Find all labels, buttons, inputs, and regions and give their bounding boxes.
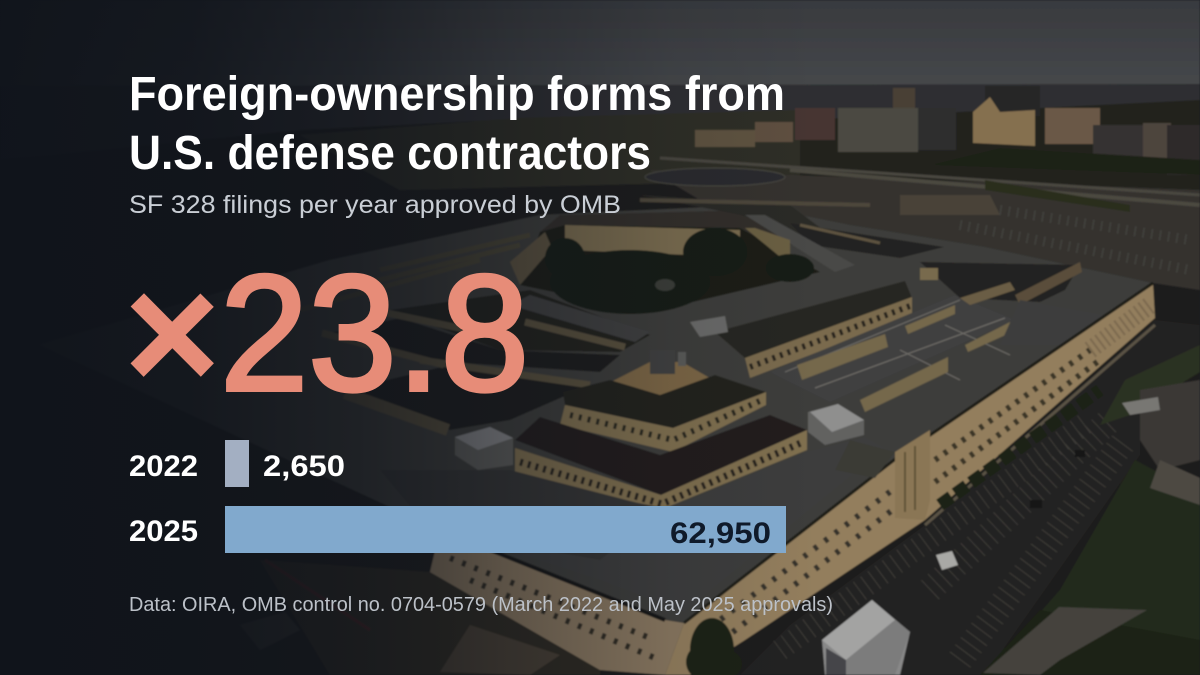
row: 2025 [129, 506, 786, 553]
title [129, 68, 785, 180]
title: Foreign-ownership forms from [129, 68, 785, 121]
far right wedge roofs [920, 262, 1120, 345]
row: 2022: 2022 [129, 450, 198, 483]
central tower block [605, 350, 722, 397]
lawn and grounds on the right [980, 345, 1200, 675]
right wedge light roof with white lines [770, 295, 1015, 412]
right wedge dark roof strip [690, 281, 912, 378]
big multiplier: 23.8 [220, 241, 529, 425]
roads and parking lots behind the building [645, 158, 1200, 290]
skyline buildings [695, 86, 1200, 175]
source note: Data: OIRA, OMB control no. 0704-0579 (March 2022 and May 2025 approvals) [129, 594, 833, 616]
rear wedge of the building [540, 195, 944, 272]
big multiplier: × [124, 241, 220, 425]
building roof [40, 205, 1153, 623]
foreground tree [686, 618, 742, 675]
subtitle: SF 328 filings per year approved by OMB [129, 191, 621, 219]
right front facade [665, 283, 1155, 675]
row: 2025: 2025 [129, 515, 198, 548]
outer tier roof and facade [515, 415, 807, 508]
concrete path [983, 607, 1147, 675]
row: 2022: 2,650 [263, 450, 345, 483]
title: U.S. defense contractors [129, 127, 651, 180]
small rooftop pavilions [455, 404, 864, 470]
left front facade [430, 530, 684, 675]
row: 2022 [129, 440, 345, 487]
inner tier roof and facade [560, 375, 766, 452]
white tent [822, 600, 910, 675]
left wedge roofs [300, 235, 650, 430]
distant water and land [0, 84, 1200, 200]
courtyard with trees [510, 225, 820, 314]
parking lot and road along the facade [740, 320, 1200, 675]
bar chart: filings per year [129, 440, 786, 553]
construction site lower left [240, 560, 600, 675]
front roof panels [380, 437, 895, 612]
sky [0, 0, 1200, 86]
row: 2025: 62,950 [670, 517, 771, 550]
